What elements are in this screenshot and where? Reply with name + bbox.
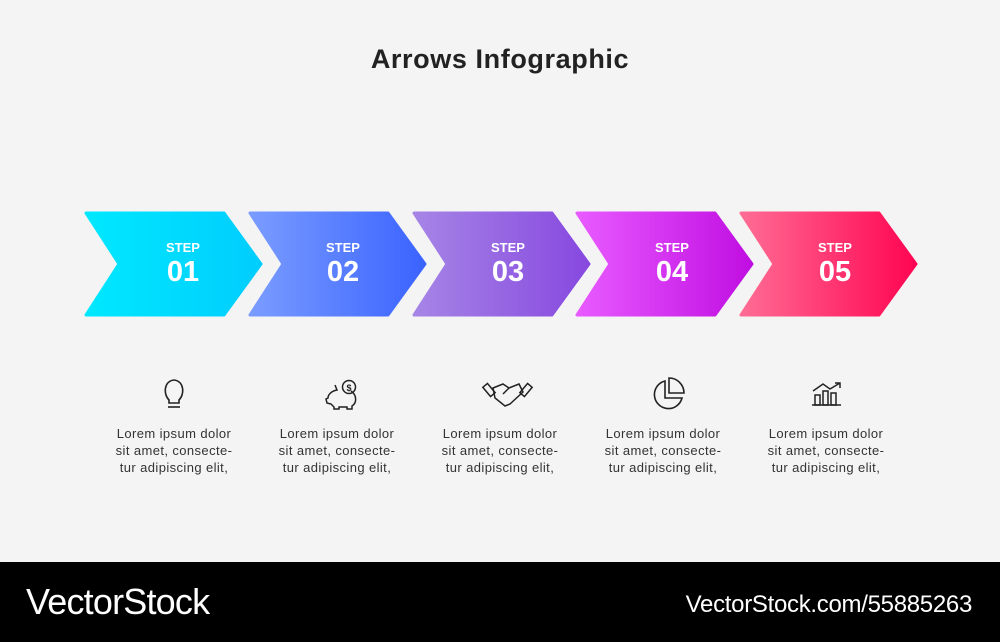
text: step 01: Lorem ipsum dolor	[117, 426, 231, 441]
arrow: step 03: 03	[492, 256, 524, 288]
arrow: step 03: STEP	[491, 240, 525, 255]
text: step 01: sit amet, consecte-	[116, 443, 232, 458]
text: step 03	[442, 426, 558, 475]
text: step 03: Lorem ipsum dolor	[443, 426, 557, 441]
text: step 04	[605, 426, 721, 475]
text: step 05: tur adipiscing elit,	[772, 460, 880, 475]
arrow: step 02	[250, 213, 425, 315]
text: step 05	[768, 426, 884, 475]
arrow: step 05	[741, 213, 916, 315]
text: step 02	[279, 426, 395, 475]
icon: growth chart	[812, 383, 841, 405]
text: step 04: sit amet, consecte-	[605, 443, 721, 458]
text: step 05: sit amet, consecte-	[768, 443, 884, 458]
text: step 05: Lorem ipsum dolor	[769, 426, 883, 441]
text: step 01	[116, 426, 232, 475]
arrow: step 02: STEP	[326, 240, 360, 255]
arrow: step 04: STEP	[655, 240, 689, 255]
text: step 03: sit amet, consecte-	[442, 443, 558, 458]
arrow: step 04	[577, 213, 752, 315]
icon: light bulb	[165, 380, 183, 407]
icon: handshake	[483, 383, 532, 406]
arrow: step 05: 05	[819, 256, 851, 288]
arrow: step 01: 01	[167, 256, 199, 288]
arrow: step 01	[86, 213, 261, 315]
arrow: step 01: STEP	[166, 240, 200, 255]
arrow: step 02: 02	[327, 256, 359, 288]
title: Arrows Infographic	[371, 44, 629, 74]
text: step 01: tur adipiscing elit,	[120, 460, 228, 475]
footer logo: VectorStock	[26, 581, 209, 622]
footer bar	[0, 562, 1000, 642]
text: step 04: tur adipiscing elit,	[609, 460, 717, 475]
text: step 02: tur adipiscing elit,	[283, 460, 391, 475]
icon: piggy bank: $	[346, 383, 352, 393]
icon: pie chart	[654, 378, 684, 409]
arrow: step 05: STEP	[818, 240, 852, 255]
footer url: VectorStock.com/55885263	[686, 591, 972, 618]
text: step 02: sit amet, consecte-	[279, 443, 395, 458]
text: step 02: Lorem ipsum dolor	[280, 426, 394, 441]
text: step 03: tur adipiscing elit,	[446, 460, 554, 475]
text: step 04: Lorem ipsum dolor	[606, 426, 720, 441]
arrow: step 03	[414, 213, 589, 315]
arrow: step 04: 04	[656, 256, 688, 288]
icon: piggy bank	[326, 380, 356, 409]
